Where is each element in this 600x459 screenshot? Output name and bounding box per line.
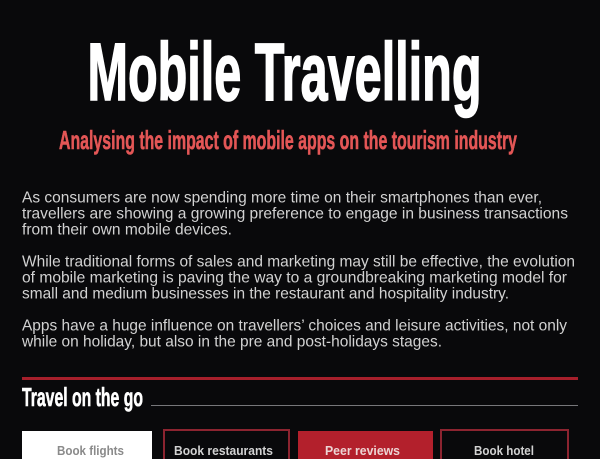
intro paragraph 1: travellers are showing a growing preference to engage in business transactions — [22, 206, 568, 222]
tab: Book flights: Book flights — [57, 444, 124, 458]
tab: Book flights — [22, 431, 152, 459]
intro paragraph 1: As consumers are now spending more time on their smartphones than ever, — [22, 190, 542, 206]
section divider: red rule — [22, 377, 578, 380]
intro paragraph 1: from their own mobile devices. — [22, 222, 232, 238]
intro paragraph 3 — [21, 318, 567, 350]
section heading: Travel on the go — [22, 382, 143, 412]
tab: Book hotel: Book hotel — [474, 444, 534, 458]
intro paragraph 1 — [22, 190, 568, 238]
tab: Peer reviews: Peer reviews — [325, 444, 400, 458]
tab: Peer reviews — [298, 431, 433, 459]
intro paragraph 2: While traditional forms of sales and marketing may still be effective, the evolution — [22, 254, 575, 270]
intro paragraph 2 — [22, 254, 575, 302]
tab: Book hotel — [441, 430, 568, 459]
intro paragraph 3: while on holiday, but also in the pre and post-holidays stages. — [21, 334, 442, 350]
intro paragraph 2: of mobile marketing is paving the way to a groundbreaking marketing model for — [22, 270, 568, 286]
tab: Book restaurants: Book restaurants — [174, 444, 273, 458]
heading rule — [151, 405, 578, 406]
intro paragraph 2: small and medium businesses in the restaurant and hospitality industry. — [22, 286, 509, 302]
tab: Book restaurants — [164, 430, 289, 459]
intro paragraph 3: Apps have a huge influence on travellers’ choices and leisure activities, not only — [22, 318, 567, 334]
